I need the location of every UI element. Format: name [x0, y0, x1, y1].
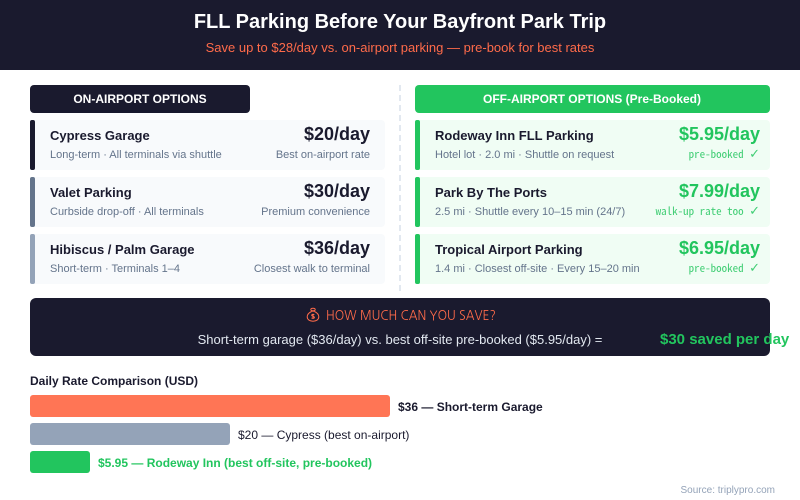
card: Cypress Garage: Best on-airport rate	[276, 149, 370, 161]
card: Cypress Garage: $20/day	[304, 124, 370, 144]
card: Rodeway Inn FLL Parking: Rodeway Inn FLL Parking	[435, 128, 594, 143]
card: Park By The Ports	[415, 177, 770, 227]
card: Cypress Garage	[30, 120, 385, 170]
card: Valet Parking	[30, 177, 385, 227]
bar: Cypress	[30, 423, 409, 445]
header banner	[0, 0, 800, 70]
card: Hibiscus / Palm Garage: Short-term · Terminals 1–4	[50, 263, 180, 275]
bar: short-term garage: $36 — Short-term Garage	[398, 400, 543, 414]
on-airport heading	[30, 85, 250, 113]
card: Cypress Garage: Long-term · All terminals via shuttle	[50, 149, 222, 161]
icon: money bag	[307, 308, 319, 321]
bar: Rodeway Inn: $5.95 — Rodeway Inn (best off-site, pre-booked)	[98, 456, 372, 470]
card: Hibiscus / Palm Garage: $36/day	[304, 238, 370, 258]
card: Hibiscus / Palm Garage: Hibiscus / Palm Garage	[50, 242, 195, 257]
savings explanation: Short-term garage ($36/day) vs. best off-site pre-booked ($5.95/day) =	[198, 332, 602, 347]
panel: off-airport options	[415, 85, 770, 284]
on-airport heading: ON-AIRPORT OPTIONS	[73, 92, 207, 106]
off-airport heading: OFF-AIRPORT OPTIONS (Pre-Booked)	[483, 92, 701, 106]
card: Park By The Ports: $7.99/day	[679, 181, 760, 201]
card: Valet Parking: Premium convenience	[261, 206, 370, 218]
card: Tropical Airport Parking: pre-booked ✓	[689, 260, 760, 276]
card: Valet Parking: Valet Parking	[50, 185, 132, 200]
card: Tropical Airport Parking	[415, 234, 770, 284]
bar: short-term garage	[30, 395, 543, 417]
card: Park By The Ports: walk-up rate too ✓	[656, 203, 760, 219]
bar: Cypress: $20 — Cypress (best on-airport)	[238, 428, 409, 442]
card: Cypress Garage: Cypress Garage	[50, 128, 150, 143]
card: Hibiscus / Palm Garage	[30, 234, 385, 284]
card: Valet Parking: Curbside drop-off · All terminals	[50, 206, 204, 218]
card: Valet Parking: $30/day	[304, 181, 370, 201]
card: Rodeway Inn FLL Parking: pre-booked ✓	[689, 146, 760, 162]
panel: on-airport options	[30, 85, 385, 284]
card: Rodeway Inn FLL Parking: $5.95/day	[679, 124, 760, 144]
card: Rodeway Inn FLL Parking	[415, 120, 770, 170]
card: Tropical Airport Parking: 1.4 mi · Closest off-site · Every 15–20 min	[435, 263, 640, 275]
bar: Rodeway Inn	[30, 451, 372, 473]
chart title: Daily Rate Comparison (USD)	[30, 374, 198, 388]
card: Tropical Airport Parking: $6.95/day	[679, 238, 760, 258]
subtitle: Save up to $28/day vs. on-airport parking — pre-book for best rates	[206, 40, 595, 55]
card: Rodeway Inn FLL Parking: Hotel lot · 2.0 mi · Shuttle on request	[435, 149, 614, 161]
card: Hibiscus / Palm Garage: Closest walk to terminal	[254, 263, 370, 275]
off-airport heading	[415, 85, 770, 113]
title: FLL Parking Before Your Bayfront Park Trip	[194, 11, 606, 33]
savings amount: $30 saved per day	[660, 331, 790, 348]
card: Park By The Ports: 2.5 mi · Shuttle every 10–15 min (24/7)	[435, 206, 625, 218]
card: Park By The Ports: Park By The Ports	[435, 185, 547, 200]
callout: savings	[30, 298, 790, 356]
bar chart: daily rate comparison	[30, 374, 543, 473]
card: Tropical Airport Parking: Tropical Airport Parking	[435, 242, 583, 257]
savings heading: HOW MUCH CAN YOU SAVE?	[326, 309, 496, 322]
source note: Source: triplypro.com	[681, 485, 775, 496]
